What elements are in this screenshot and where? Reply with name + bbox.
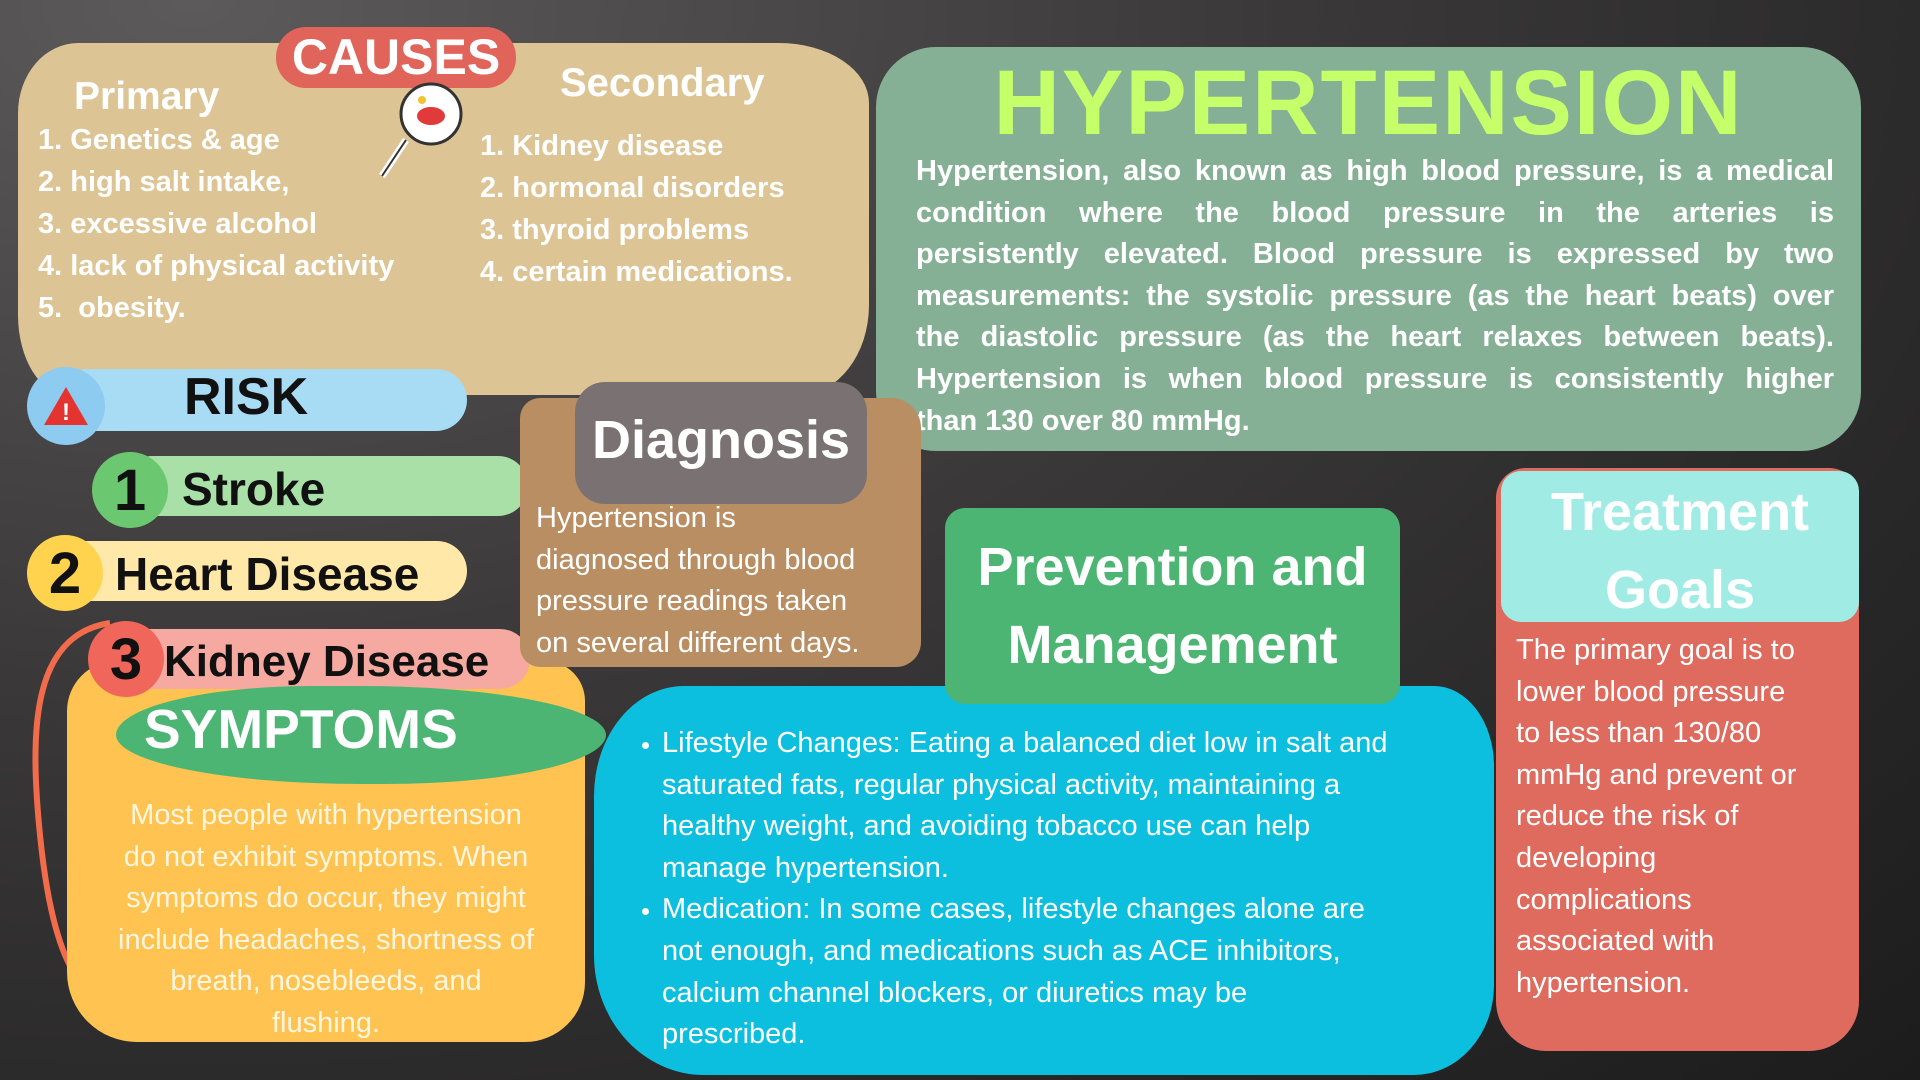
risk: kidney disease: Kidney Disease: [164, 637, 489, 686]
panel: treatment goals: [1496, 468, 1859, 1051]
list: primary causes: 2. high salt intake,: [38, 166, 289, 198]
text: symptoms: breath, nosebleeds, and: [170, 965, 482, 997]
text: bullets: not enough, and medications such as ACE inhibitors,: [662, 935, 1341, 967]
text: definition: Hypertension, also known as high blood pressure, is a medical: [916, 155, 1834, 187]
text: bullets: saturated fats, regular physical activity, maintaining a: [662, 769, 1340, 801]
risk: stroke: Stroke: [182, 463, 325, 515]
text: bullets: prescribed.: [662, 1018, 805, 1050]
text: bullets: healthy weight, and avoiding tobacco use can help: [662, 810, 1310, 842]
label: causes: CAUSES: [292, 29, 500, 85]
text: symptoms: include headaches, shortness of: [118, 924, 534, 956]
panel: hypertension: [876, 47, 1861, 451]
risk: heart disease: 2: [49, 540, 81, 606]
heading: diagnosis: Diagnosis: [592, 410, 850, 470]
list: secondary causes: [480, 130, 793, 288]
risk: heart disease: [27, 535, 467, 611]
heading: prevention and management: [945, 508, 1400, 704]
text: treatment: mmHg and prevent or: [1516, 759, 1796, 791]
list: primary causes: 3. excessive alcohol: [38, 208, 317, 240]
risk header: [27, 367, 467, 445]
heading: primary: Primary: [74, 75, 219, 118]
text: symptoms: do not exhibit symptoms. When: [124, 841, 528, 873]
text: definition: [916, 155, 1834, 437]
text: treatment: The primary goal is to: [1516, 634, 1795, 666]
heading: symptoms: SYMPTOMS: [144, 698, 458, 760]
text: diagnosis: on several different days.: [536, 627, 860, 659]
list: primary causes: 5. obesity.: [38, 292, 186, 324]
panel: causes: [18, 43, 869, 395]
text: treatment: lower blood pressure: [1516, 676, 1785, 708]
heading: treatment goals: Treatment: [1551, 482, 1809, 542]
list: primary causes: 1. Genetics & age: [38, 124, 280, 156]
text: definition: measurements: the systolic pressure (as the heart beats) over: [916, 280, 1834, 312]
list: secondary causes: 2. hormonal disorders: [480, 172, 785, 204]
text: treatment: [1516, 634, 1796, 999]
text: bullets: calcium channel blockers, or diuretics may be: [662, 977, 1247, 1009]
text: bullets: Medication: In some cases, lifestyle changes alone are: [662, 893, 1365, 925]
risk: kidney disease: [88, 621, 530, 697]
list: secondary causes: 4. certain medications.: [480, 256, 793, 288]
heading: treatment goals: [1501, 471, 1859, 622]
text: treatment: complications: [1516, 884, 1692, 916]
text: diagnosis: diagnosed through blood: [536, 544, 855, 576]
text: definition: persistently elevated. Blood pressure is expressed by two: [916, 238, 1834, 270]
text: diagnosis: Hypertension is: [536, 502, 736, 534]
text: treatment: associated with: [1516, 925, 1714, 957]
icon: warning: [27, 367, 105, 445]
text: definition: condition where the blood pressure in the arteries is: [916, 197, 1834, 229]
text: bullets: Lifestyle Changes: Eating a balanced diet low in salt and: [662, 727, 1387, 759]
text: symptoms: symptoms do occur, they might: [126, 882, 526, 914]
risk: stroke: [92, 452, 520, 528]
text: treatment: reduce the risk of: [1516, 800, 1738, 832]
heading: symptoms: [116, 686, 606, 784]
panel: prevention list: [594, 686, 1494, 1075]
text: diagnosis: pressure readings taken: [536, 585, 847, 617]
text: bullets: manage hypertension.: [662, 852, 949, 884]
list: secondary causes: 3. thyroid problems: [480, 214, 749, 246]
list: primary causes: 4. lack of physical activity: [38, 250, 394, 282]
heading: secondary: Secondary: [560, 61, 765, 105]
text: bullets: [642, 727, 1387, 1050]
heading: treatment goals: Goals: [1605, 560, 1755, 620]
text: definition: than 130 over 80 mmHg.: [916, 405, 1250, 437]
text: treatment: hypertension.: [1516, 967, 1690, 999]
icon: magnifier: [379, 82, 462, 178]
title: hypertension: HYPERTENSION: [994, 52, 1743, 154]
heading: prevention and management: Management: [1007, 615, 1338, 675]
panel: symptoms: [67, 661, 585, 1042]
text: diagnosis: [536, 502, 860, 659]
text: symptoms: [118, 799, 534, 1039]
list: primary causes: [38, 124, 394, 324]
list: secondary causes: 1. Kidney disease: [480, 130, 723, 162]
risk: kidney disease: 3: [110, 626, 142, 692]
text: treatment: developing: [1516, 842, 1656, 874]
heading: prevention and management: Prevention and: [977, 537, 1368, 597]
risk: heart disease: Heart Disease: [115, 548, 419, 600]
panel: diagnosis: [520, 398, 921, 667]
text: symptoms: Most people with hypertension: [130, 799, 522, 831]
text: definition: Hypertension is when blood pressure is consistently higher: [916, 363, 1834, 395]
risk: stroke: 1: [114, 458, 146, 522]
decorative orange arc: [32, 620, 110, 966]
risk header: RISK: [184, 368, 308, 426]
text: treatment: to less than 130/80: [1516, 717, 1761, 749]
icon: warning: !: [62, 399, 70, 426]
text: symptoms: flushing.: [272, 1007, 380, 1039]
heading: diagnosis: [575, 382, 867, 504]
text: definition: the diastolic pressure (as the heart relaxes between beats).: [916, 321, 1834, 353]
